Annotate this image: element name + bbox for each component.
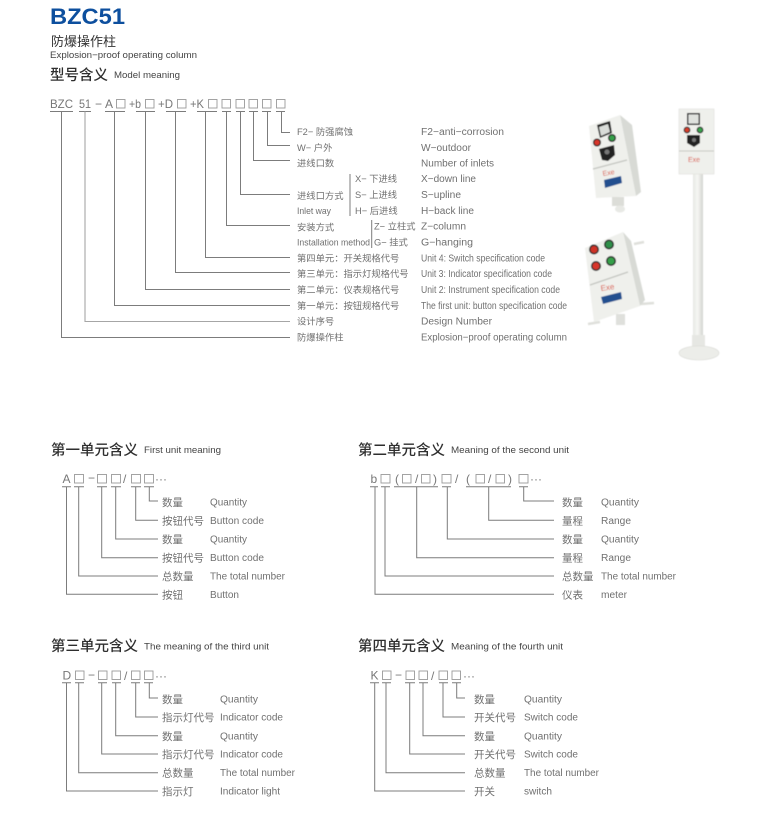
product photo: pole-mounted column bbox=[679, 109, 719, 360]
labels: third unit: Indicator light bbox=[220, 786, 280, 798]
labels: fourth unit: 开关代号 bbox=[474, 711, 516, 724]
model labels in English: Explosion−proof operating column bbox=[421, 332, 567, 344]
model code row: − bbox=[95, 97, 102, 111]
code row: first unit: / bbox=[123, 472, 127, 486]
model labels in English: Number of inlets bbox=[421, 158, 494, 170]
labels: second unit: Quantity bbox=[601, 534, 639, 546]
model labels in Chinese: Installation method bbox=[297, 238, 370, 248]
labels: first unit: Button code bbox=[210, 553, 264, 564]
labels: second unit: 仪表 bbox=[562, 588, 583, 602]
labels: first unit: 总数量 bbox=[162, 570, 194, 583]
model labels in Chinese: X− 下进线 bbox=[355, 173, 397, 184]
model labels in Chinese: 设计序号 bbox=[297, 316, 334, 326]
heading: fourth unit: Meaning of the fourth unit bbox=[451, 642, 563, 652]
labels: third unit: 指示灯代号 bbox=[162, 711, 214, 724]
labels: second unit: Quantity bbox=[601, 498, 639, 508]
labels: second unit: 总数量 bbox=[562, 570, 594, 583]
model code row: A bbox=[105, 97, 113, 111]
model code row: +K bbox=[190, 97, 204, 111]
code row: third unit: − bbox=[88, 668, 95, 682]
labels: third unit: 指示灯 bbox=[162, 785, 194, 798]
labels: third unit bbox=[162, 693, 296, 798]
code row: third unit bbox=[62, 668, 167, 683]
model labels in Chinese bbox=[297, 126, 416, 342]
labels: first unit: Quantity bbox=[210, 534, 247, 546]
model labels in English: X−down line bbox=[421, 174, 476, 185]
model code row: +b bbox=[129, 97, 141, 111]
model labels in English: The first unit: button specification code bbox=[421, 301, 567, 312]
code row: first unit bbox=[62, 471, 167, 486]
labels: first unit: 按钮 bbox=[162, 588, 183, 602]
model labels in Chinese: 进线口方式 bbox=[297, 190, 344, 201]
code row: second unit: / bbox=[415, 472, 419, 486]
heading: third unit: 第三单元含义 bbox=[51, 637, 138, 655]
model labels in English: H−back line bbox=[421, 206, 474, 217]
panel: second unit meaning bbox=[358, 441, 677, 602]
code row: second unit: / bbox=[455, 472, 459, 486]
labels: third unit: Indicator code bbox=[220, 750, 283, 760]
labels: first unit: 按钮代号 bbox=[162, 514, 204, 528]
model labels in Chinese: W− 户外 bbox=[297, 142, 332, 153]
labels: fourth unit: 数量 bbox=[474, 693, 495, 706]
labels: fourth unit: Quantity bbox=[524, 732, 562, 742]
labels: fourth unit: switch bbox=[524, 786, 552, 798]
model labels in Chinese: S− 上进线 bbox=[355, 189, 397, 200]
model code row bbox=[50, 97, 285, 111]
model labels in Chinese: 第一单元：按钮规格代号 bbox=[297, 300, 399, 311]
code row: third unit: D bbox=[62, 668, 72, 682]
labels: fourth unit: 数量 bbox=[474, 730, 495, 743]
labels: third unit: 总数量 bbox=[162, 766, 194, 780]
labels: third unit: The total number bbox=[220, 768, 296, 779]
code row: second unit: ( bbox=[466, 472, 470, 486]
model labels in Chinese: 进线口数 bbox=[297, 158, 335, 168]
code row: first unit: A bbox=[62, 472, 71, 486]
heading: second unit: 第二单元含义 bbox=[358, 441, 445, 459]
heading: first unit: First unit meaning bbox=[144, 445, 221, 456]
labels: second unit: The total number bbox=[601, 572, 677, 582]
code row: second unit: ) bbox=[508, 472, 512, 486]
code row: third unit: ··· bbox=[155, 669, 167, 683]
code row: second unit: ··· bbox=[530, 472, 542, 486]
product photo: tilted control box with meter bbox=[589, 115, 641, 212]
model labels in Chinese: 第三单元：指示灯规格代号 bbox=[297, 268, 409, 279]
model labels in English bbox=[421, 127, 567, 344]
labels: third unit: 数量 bbox=[162, 730, 183, 743]
labels: fourth unit: Quantity bbox=[524, 694, 562, 706]
model labels in English: Unit 2: Instrument specification code bbox=[421, 285, 560, 296]
header block bbox=[50, 4, 197, 61]
labels: fourth unit: 开关代号 bbox=[474, 748, 516, 761]
model connector lines bbox=[50, 112, 372, 338]
labels: second unit: 数量 bbox=[562, 533, 583, 546]
code row: second unit: ( bbox=[395, 472, 399, 486]
labels: first unit: Button bbox=[210, 590, 239, 601]
product photo: four-button control box bbox=[585, 232, 654, 325]
labels: first unit: The total number bbox=[210, 572, 286, 582]
labels: fourth unit: The total number bbox=[524, 768, 600, 779]
code row: first unit: − bbox=[88, 471, 95, 485]
panel: third unit meaning bbox=[51, 637, 296, 798]
heading: fourth unit: 第四单元含义 bbox=[358, 637, 445, 655]
model labels in English: W−outdoor bbox=[421, 143, 472, 154]
heading: model meaning bbox=[50, 66, 180, 84]
code row: second unit: b bbox=[370, 472, 378, 486]
code row: fourth unit: K bbox=[370, 668, 379, 682]
code row: second unit: / bbox=[488, 472, 492, 486]
model labels in English: G−hanging bbox=[421, 238, 473, 248]
heading: model meaning: 型号含义 bbox=[50, 66, 108, 84]
labels: fourth unit: 总数量 bbox=[474, 766, 506, 780]
model labels in Chinese: 第四单元：开关规格代号 bbox=[297, 252, 399, 264]
model labels in Chinese: 安装方式 bbox=[297, 222, 334, 232]
labels: first unit: 按钮代号 bbox=[162, 552, 204, 564]
heading: model meaning: Model meaning bbox=[114, 70, 180, 81]
code row: third unit: / bbox=[124, 669, 128, 683]
labels: third unit: Quantity bbox=[220, 694, 258, 706]
connector lines: third unit bbox=[62, 683, 158, 791]
panel: first unit meaning bbox=[51, 441, 286, 602]
model labels in Chinese: 第二单元：仪表规格代号 bbox=[297, 284, 399, 295]
code row: second unit bbox=[370, 472, 542, 486]
labels: third unit: Quantity bbox=[220, 732, 258, 742]
labels: first unit bbox=[162, 496, 286, 602]
labels: first unit: Button code bbox=[210, 516, 264, 527]
labels: second unit bbox=[562, 496, 677, 602]
code row: fourth unit: − bbox=[395, 668, 402, 682]
labels: second unit: Range bbox=[601, 516, 631, 527]
code row: fourth unit bbox=[370, 668, 475, 683]
model code row: BZC bbox=[50, 97, 73, 111]
model code row: +D bbox=[158, 97, 173, 111]
model labels in Chinese: Z− 立柱式 bbox=[374, 220, 416, 232]
labels: fourth unit bbox=[474, 693, 600, 798]
model labels in English: Unit 3: Indicator specification code bbox=[421, 269, 552, 280]
labels: second unit: 数量 bbox=[562, 496, 583, 509]
model labels in English: S−upline bbox=[421, 190, 461, 201]
title: BZC51: BZC51 bbox=[50, 4, 125, 29]
code row: second unit: ) bbox=[433, 472, 437, 486]
subtitle: Chinese product name: 防爆操作柱 bbox=[51, 34, 116, 49]
connector lines: fourth unit bbox=[370, 683, 465, 791]
labels: third unit: Indicator code bbox=[220, 712, 283, 724]
heading: second unit bbox=[358, 441, 569, 459]
code row: first unit: ··· bbox=[155, 472, 167, 486]
labels: first unit: 数量 bbox=[162, 496, 183, 509]
product photo: tilted control box with meter: Exe bbox=[602, 169, 615, 178]
labels: second unit: 量程 bbox=[562, 552, 583, 564]
code row: fourth unit: / bbox=[431, 669, 435, 683]
labels: first unit: Quantity bbox=[210, 498, 247, 508]
product photo: pole-mounted column: Exe bbox=[688, 157, 700, 164]
labels: third unit: 指示灯代号 bbox=[162, 748, 214, 761]
heading: first unit bbox=[51, 441, 221, 459]
labels: fourth unit: Switch code bbox=[524, 750, 578, 760]
heading: first unit: 第一单元含义 bbox=[51, 441, 138, 459]
model labels in Chinese: 防爆操作柱 bbox=[297, 332, 344, 342]
model labels in English: Design Number bbox=[421, 316, 493, 328]
labels: second unit: 量程 bbox=[562, 516, 583, 528]
model labels in Chinese: F2− 防强腐蚀 bbox=[297, 126, 353, 137]
heading: third unit bbox=[51, 637, 269, 655]
model labels in English: F2−anti−corrosion bbox=[421, 127, 504, 138]
model code row: 51 bbox=[79, 97, 91, 111]
labels: fourth unit: 开关 bbox=[474, 785, 495, 798]
labels: second unit: Range bbox=[601, 553, 631, 564]
labels: second unit: meter bbox=[601, 590, 628, 601]
labels: third unit: 数量 bbox=[162, 693, 183, 706]
connector lines: second unit bbox=[370, 487, 554, 594]
subtitle: English product name: Explosion−proof operating column bbox=[50, 50, 197, 61]
heading: third unit: The meaning of the third unit bbox=[144, 642, 269, 652]
model labels in Chinese: Inlet way bbox=[297, 206, 331, 216]
model labels in Chinese: H− 后进线 bbox=[355, 205, 398, 216]
heading: fourth unit bbox=[358, 637, 563, 655]
model labels in English: Z−column bbox=[421, 222, 466, 232]
labels: first unit: 数量 bbox=[162, 533, 183, 546]
product photo: four-button control box: Exe bbox=[600, 282, 615, 293]
labels: fourth unit: Switch code bbox=[524, 712, 578, 724]
model labels in Chinese: G− 挂式 bbox=[374, 236, 408, 248]
model labels in English: Unit 4: Switch specification code bbox=[421, 254, 545, 264]
heading: second unit: Meaning of the second unit bbox=[451, 445, 569, 456]
panel: fourth unit meaning bbox=[358, 637, 600, 798]
code row: fourth unit: ··· bbox=[463, 669, 475, 683]
connector lines: first unit bbox=[62, 487, 158, 594]
